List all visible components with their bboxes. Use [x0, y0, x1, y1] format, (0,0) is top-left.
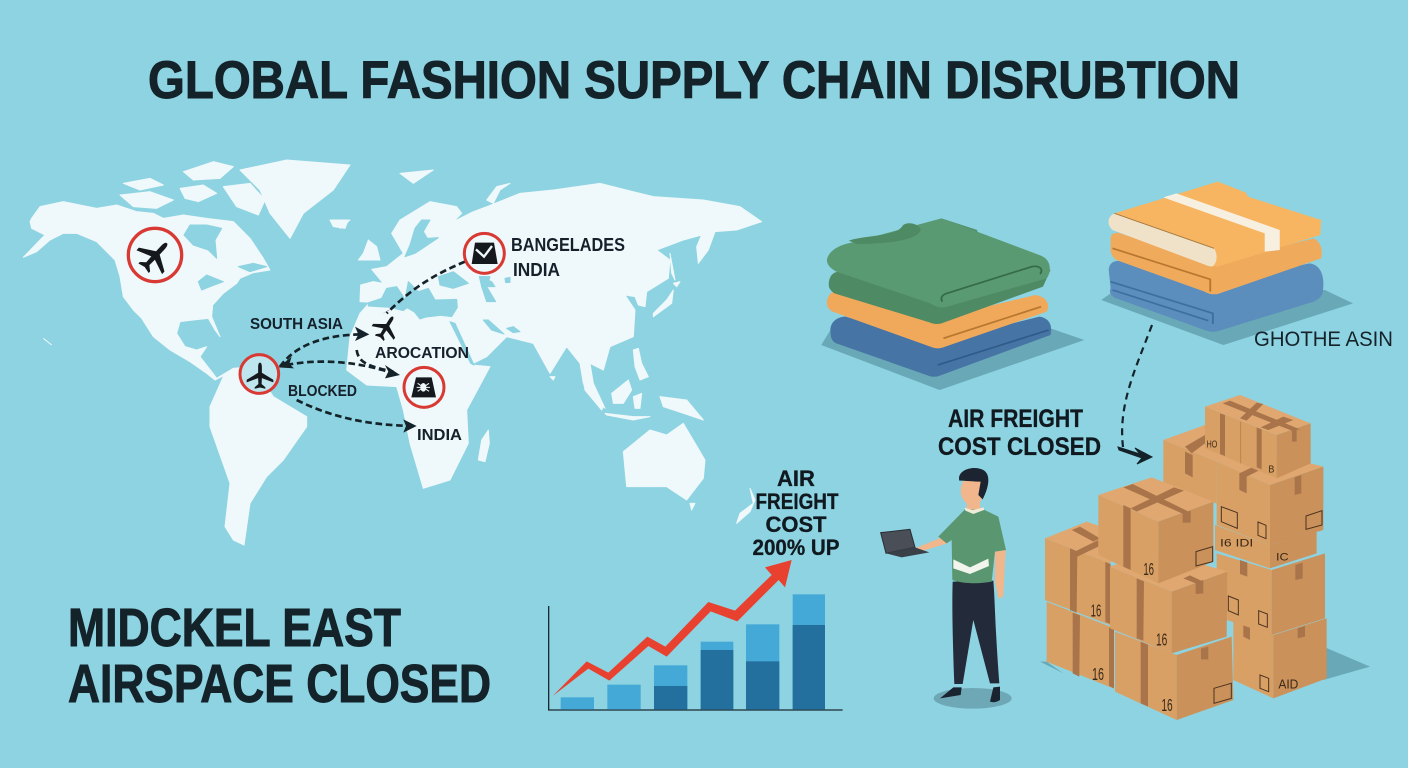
second right box [1217, 553, 1325, 635]
seas [184, 220, 520, 365]
middle box: 16 [1156, 630, 1167, 650]
person with laptop [881, 468, 1012, 709]
bottom right box: AID [1278, 676, 1298, 691]
North America [23, 202, 270, 380]
left lower box: 16 [1092, 664, 1104, 684]
Arctic islands [43, 162, 348, 345]
top small box: HO [1207, 439, 1217, 450]
label: Ghothe Asin: GHOTHE ASIN [1254, 328, 1393, 351]
left lower box [1047, 602, 1114, 688]
title: GLOBAL FASHION SUPPLY CHAIN DISRUBTION [148, 51, 1240, 110]
callout: air freight cost 200% up: 200% UP [752, 535, 840, 560]
clothes stack: right [1101, 182, 1353, 345]
South America [210, 367, 307, 545]
icon: plane over North Africa [368, 310, 404, 345]
Svalbard, Novaya Zemlya, Britain, Iceland [340, 170, 510, 260]
top front box: 16 [1143, 559, 1154, 579]
top front box [1098, 477, 1213, 583]
clothes stack: left [821, 218, 1084, 390]
Japan and Sakhalin [653, 253, 680, 317]
dashed arrow to boxes [1118, 325, 1152, 464]
map label: India (Asia): INDIA [513, 260, 560, 280]
Philippines, Sumatra, Java [550, 348, 650, 420]
Africa [347, 304, 490, 488]
callout: air freight cost 200% up: FREIGHT [756, 489, 839, 514]
left upper box: 16 [1091, 601, 1101, 621]
icon: bag with check in red circle [464, 233, 504, 273]
heading: airspace closed: AIRSPACE CLOSED [68, 654, 491, 714]
map label: India (Africa): INDIA [417, 427, 462, 444]
label: air freight cost closed [938, 405, 1101, 461]
world map [23, 160, 762, 545]
top small box: B [1268, 465, 1275, 476]
narrow band box: IC [1276, 552, 1289, 564]
Greenland [240, 160, 350, 238]
Borneo, Sulawesi, New Guinea [612, 380, 703, 420]
Eurasia [360, 183, 762, 408]
bar chart: air freight cost [549, 560, 843, 710]
label: air freight cost closed: AIR FREIGHT [948, 405, 1083, 433]
chart axes [549, 606, 843, 710]
top big box [1217, 448, 1323, 545]
front bottom box: 16 [1161, 695, 1173, 715]
map label: Arocation: AROCATION [375, 345, 469, 362]
heading: airspace closed [68, 598, 491, 714]
map: continents in west frame [23, 160, 762, 545]
left upper box [1045, 522, 1130, 625]
map label: Blocked: BLOCKED [288, 383, 357, 400]
top small box [1205, 395, 1311, 478]
bottom right box [1233, 617, 1327, 698]
map label: Bangelades: BANGELADES [511, 235, 625, 255]
callout: air freight cost 200% up: AIR [777, 466, 815, 491]
icon: bag with bug in red circle [404, 367, 444, 407]
back-left box [1163, 425, 1230, 503]
narrow band box [1215, 525, 1317, 568]
Madagascar [478, 430, 489, 462]
middle box [1110, 550, 1227, 653]
icon: blocked plane over North America [128, 228, 182, 282]
narrow band box: I6 IDI [1220, 538, 1253, 550]
red rising arrow [553, 560, 792, 696]
icon: blocked plane over South America [240, 355, 279, 393]
map label: South Asia: SOUTH ASIA [250, 316, 343, 333]
label: air freight cost closed: COST CLOSED [938, 433, 1101, 461]
Australia, Tasmania, New Zealand [623, 423, 755, 523]
callout: air freight cost 200% up: COST [765, 512, 827, 537]
callout: air freight cost 200% up [752, 466, 840, 560]
cardboard box stacks [1040, 395, 1370, 720]
route arrows on map [278, 262, 465, 433]
front bottom box [1115, 632, 1233, 720]
heading: airspace closed: MIDCKEL EAST [68, 598, 401, 658]
